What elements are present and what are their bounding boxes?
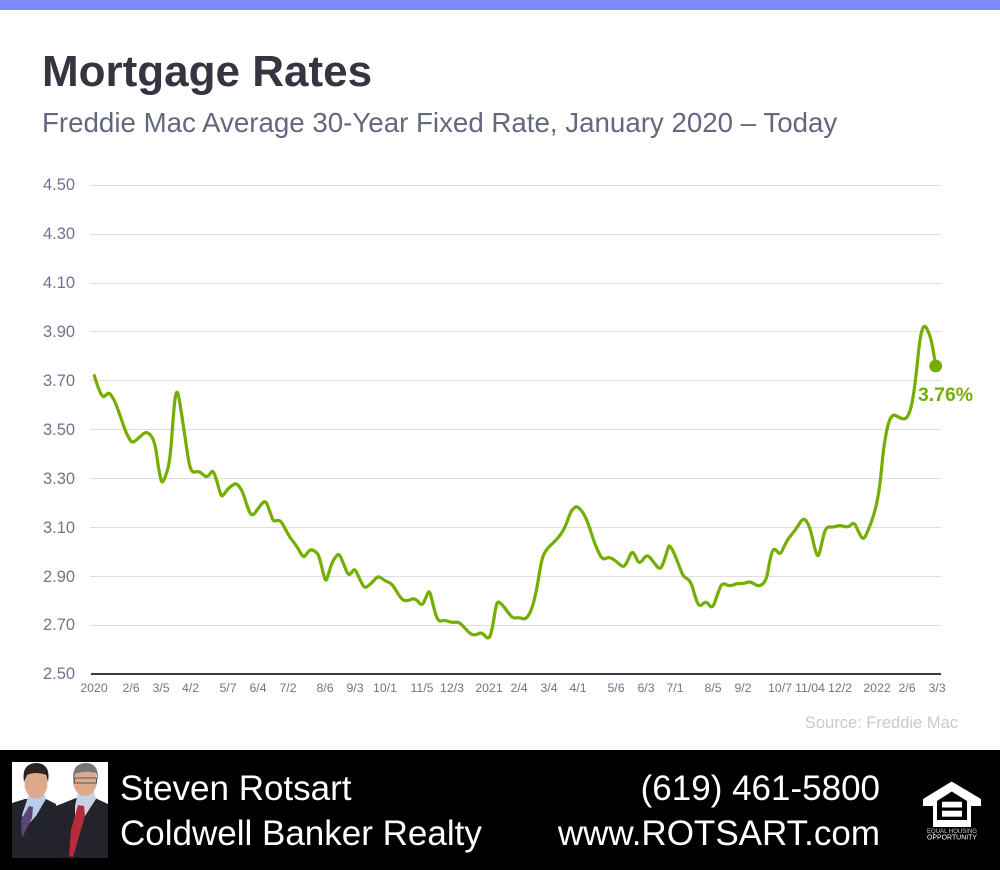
y axis labels: 3.90 — [43, 323, 75, 341]
end point marker — [929, 360, 942, 372]
footer band — [0, 750, 1000, 870]
x axis labels: 6/3 — [637, 681, 655, 695]
agent name and company: Steven Rotsart — [120, 769, 352, 808]
right agent — [56, 763, 108, 858]
x axis labels: 8/6 — [316, 681, 334, 695]
agent name and company: Coldwell Banker Realty — [120, 814, 482, 853]
x axis labels: 12/2 — [828, 681, 852, 695]
source note: Source: Freddie Mac — [805, 714, 958, 732]
agent name and company — [120, 769, 482, 853]
y axis labels: 4.30 — [43, 225, 75, 243]
x axis labels: 2021 — [475, 681, 503, 695]
x axis labels: 7/1 — [666, 681, 684, 695]
y axis gridlines — [90, 186, 941, 626]
left agent — [12, 763, 62, 858]
x axis labels: 2022 — [863, 681, 891, 695]
x axis labels: 12/3 — [440, 681, 464, 695]
x axis labels: 8/5 — [704, 681, 722, 695]
x axis labels: 10/7 — [768, 681, 792, 695]
x axis labels: 2020 — [80, 681, 108, 695]
y axis labels: 2.70 — [43, 616, 75, 634]
y axis labels: 3.10 — [43, 519, 75, 537]
x axis labels: 2/6 — [122, 681, 140, 695]
top accent bar — [0, 0, 1000, 10]
y axis labels: 3.50 — [43, 421, 75, 439]
x axis labels: 4/2 — [182, 681, 199, 695]
x axis labels: 7/2 — [279, 681, 297, 695]
icon: equal housing opportunity: EQUAL HOUSING — [927, 829, 977, 835]
rate line — [94, 326, 936, 638]
y axis labels: 3.30 — [43, 470, 75, 488]
x axis labels: 11/5 — [410, 681, 434, 695]
title: Mortgage Rates — [42, 47, 372, 96]
line chart — [43, 176, 973, 695]
x axis labels: 9/3 — [346, 681, 364, 695]
x axis labels: 6/4 — [249, 681, 267, 695]
y axis labels: 2.90 — [43, 568, 75, 586]
icon: equal housing opportunity — [923, 782, 981, 842]
contact details: (619) 461-5800 — [641, 769, 880, 808]
subtitle: Freddie Mac Average 30-Year Fixed Rate, January 2020 – Today — [42, 107, 837, 138]
contact details — [557, 769, 880, 853]
y axis labels: 3.70 — [43, 372, 75, 390]
x axis labels: 3/5 — [152, 681, 170, 695]
agents photo — [12, 762, 108, 858]
icon: equal housing opportunity: OPPORTUNITY — [927, 834, 977, 842]
x axis labels: 9/2 — [734, 681, 752, 695]
x axis labels: 4/1 — [569, 681, 587, 695]
x axis labels: 5/7 — [219, 681, 237, 695]
x axis line — [91, 673, 941, 675]
end value label: 3.76% — [918, 384, 973, 406]
x axis labels: 5/6 — [607, 681, 625, 695]
x axis labels: 2/6 — [898, 681, 916, 695]
y axis labels: 2.50 — [43, 665, 75, 683]
y axis labels — [43, 176, 75, 683]
contact details: www.ROTSART.com — [557, 814, 880, 853]
y axis labels: 4.10 — [43, 274, 75, 292]
x axis labels: 11/04 — [795, 681, 825, 695]
x axis labels: 3/4 — [540, 681, 558, 695]
x axis labels: 2/4 — [510, 681, 528, 695]
x axis labels: 10/1 — [373, 681, 397, 695]
y axis labels: 4.50 — [43, 176, 75, 194]
x axis labels — [80, 681, 946, 695]
x axis labels: 3/3 — [928, 681, 946, 695]
